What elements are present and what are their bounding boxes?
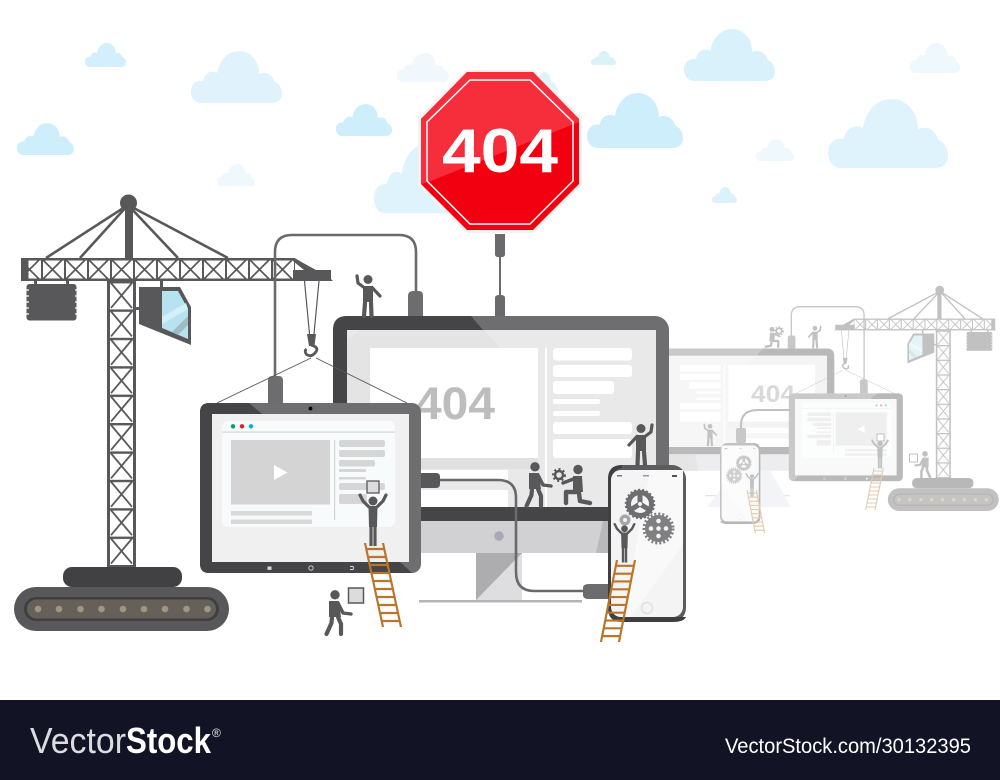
tablet — [200, 358, 421, 573]
footer logo — [30, 720, 221, 761]
worker waving on phone — [629, 424, 652, 465]
worker on phone ladder — [615, 514, 634, 562]
tablet-to-monitor top cable — [275, 235, 423, 380]
footer image id: VectorStock.com/30132395 — [725, 735, 971, 758]
gear held by workers — [553, 469, 565, 481]
clouds — [17, 29, 960, 213]
faded monitor — [661, 348, 834, 496]
footer bar — [0, 700, 1000, 780]
tablet ladder — [365, 543, 401, 627]
cable from tablet to phone — [421, 473, 608, 599]
faded phone cable — [741, 410, 790, 443]
sign red octagon — [421, 72, 579, 230]
faded 404 text: 404 — [751, 381, 796, 408]
footer logo: Vector — [30, 720, 126, 761]
sign inner border — [427, 80, 573, 224]
sign highlight — [421, 72, 579, 184]
faded monitor flared stand — [707, 470, 791, 507]
stop sign — [418, 70, 582, 233]
faded ladder on phone — [747, 490, 765, 533]
worker on ladder lifting box — [360, 481, 386, 546]
worker carrying box — [326, 588, 364, 634]
faded ladder on tablet — [866, 468, 883, 510]
faded background scene — [661, 286, 999, 533]
phone — [608, 465, 686, 622]
faded phone — [720, 443, 760, 524]
sign text: 404 — [442, 117, 559, 186]
faded cable and connector — [788, 307, 864, 381]
footer logo: ® — [212, 726, 221, 740]
worker standing on monitor chin — [526, 462, 551, 506]
sign post cable — [495, 234, 505, 316]
worker kneeling — [563, 465, 590, 503]
worker waving on monitor — [357, 275, 380, 316]
sign halo — [418, 70, 582, 233]
faded workers — [704, 326, 930, 496]
phone ladder — [601, 560, 635, 642]
monitor — [333, 316, 669, 602]
faded phone connector — [736, 428, 746, 443]
faded crane — [834, 286, 999, 511]
monitor 404 text: 404 — [415, 378, 495, 429]
faded tablet — [789, 370, 903, 481]
footer logo: Stock — [126, 720, 212, 761]
crane — [14, 194, 333, 631]
